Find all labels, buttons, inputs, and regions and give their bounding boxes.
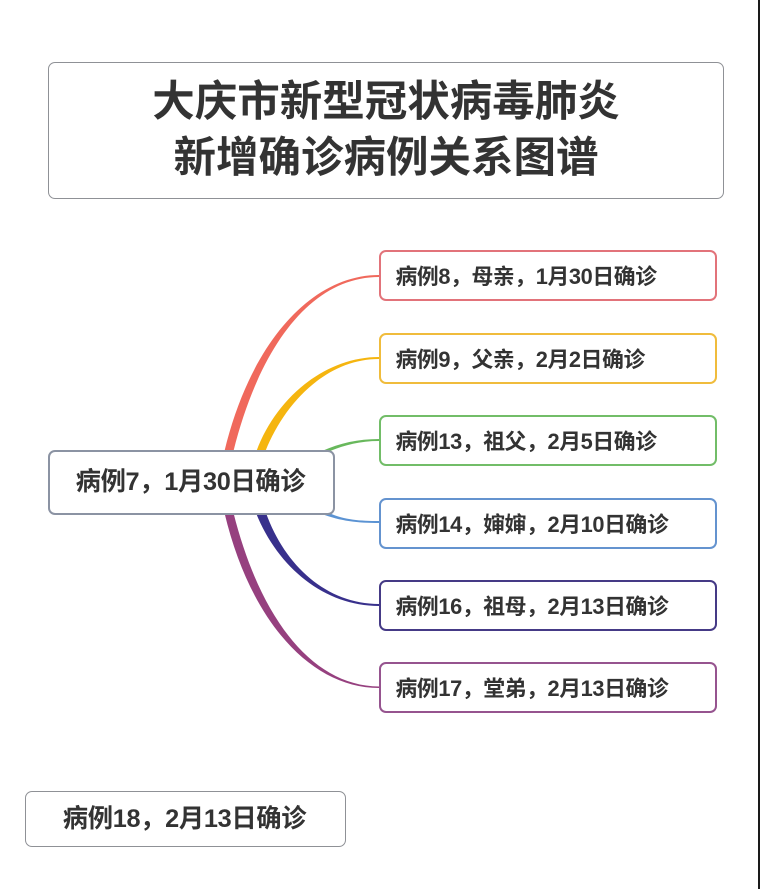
node: case 13 [379,415,717,466]
title: 大庆市新型冠状病毒肺炎 [152,78,620,126]
right edge black strip [758,0,760,889]
node: case 9 [379,333,717,384]
central node: case 7 [48,450,335,515]
title: 新增确诊病例关系图谱 [173,134,598,182]
node: case 17 [379,662,717,713]
node: case 14 [379,498,717,549]
node: case 8 [379,250,717,301]
central node: case 7: 病例7，1月30日确诊 [76,468,305,496]
node: case 14: 病例14，婶婶，2月10日确诊 [396,512,668,536]
node: case 8: 病例8，母亲，1月30日确诊 [396,264,657,288]
node: case 16: 病例16，祖母，2月13日确诊 [396,594,668,618]
node: case 9: 病例9，父亲，2月2日确诊 [396,346,645,372]
curve: blue to case 14 [322,513,379,523]
node: case 17: 病例17，堂弟，2月13日确诊 [396,676,668,700]
curve: red to case 8 [224,275,379,451]
curve: navy to case 16 [256,513,379,606]
curve: yellow to case 9 [256,357,379,451]
node: case 18: 病例18，2月13日确诊 [63,804,306,832]
node: case 18 [25,791,346,847]
node: case 16 [379,580,717,631]
title [48,62,724,199]
curve: purple to case 17 [224,513,379,688]
curve: green to case 13 [322,439,379,451]
node: case 13: 病例13，祖父，2月5日确诊 [396,428,657,454]
